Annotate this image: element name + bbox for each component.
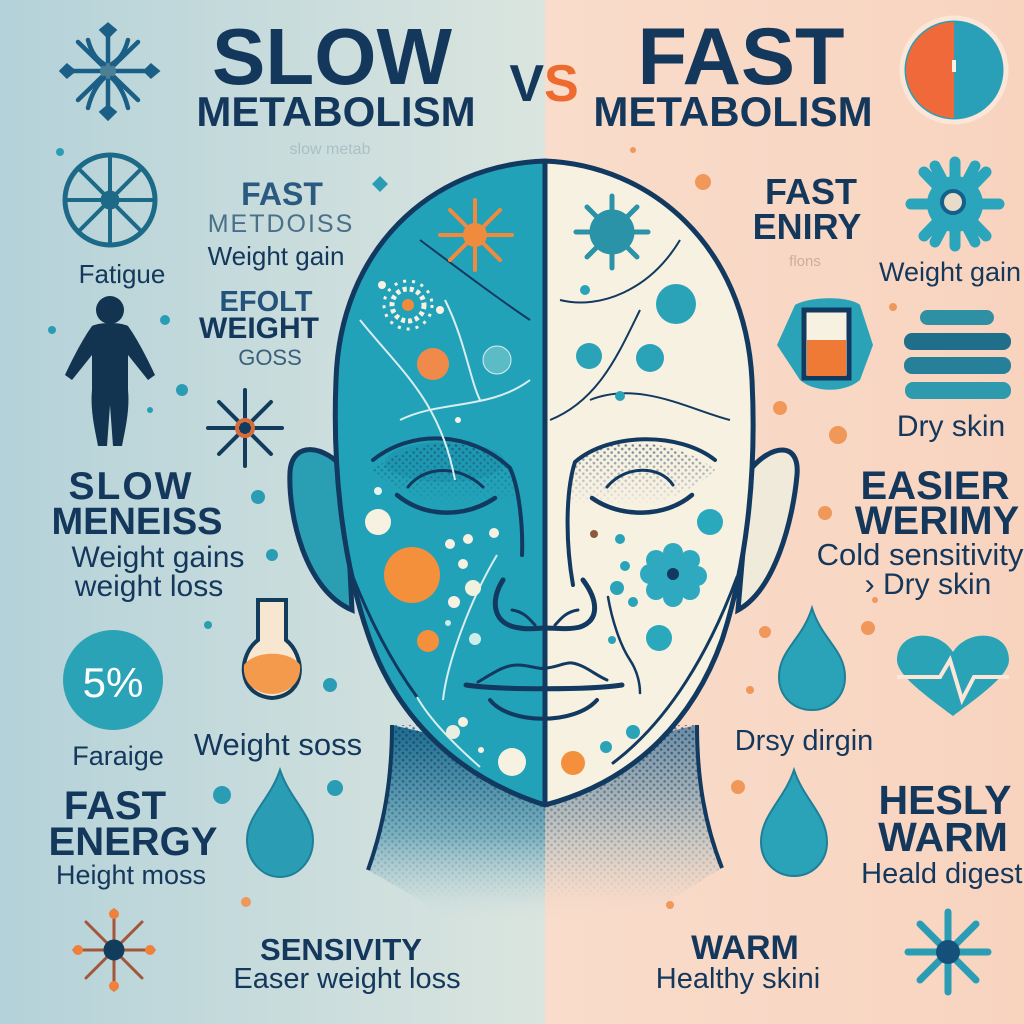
title: fast: FAST xyxy=(637,12,845,102)
label: weight gain: Weight gain xyxy=(208,241,344,271)
label: efolt: EFOLT xyxy=(220,286,312,318)
label: weight: WEIGHT xyxy=(199,312,319,345)
label: dry skin second: › Dry skin xyxy=(865,568,991,601)
label: warm bottom: WARM xyxy=(691,929,799,967)
label: healthy skin: Healthy skini xyxy=(656,963,820,995)
label: metdoiss: METDOISS xyxy=(208,210,354,238)
label: heald digestion: Heald digesti xyxy=(861,858,1024,890)
skin lines xyxy=(360,240,730,767)
label: height moss: Height moss xyxy=(56,860,206,890)
right half of head xyxy=(545,161,753,805)
subtitle: fast metabolism: METABOLISM xyxy=(593,88,873,135)
illustration: half blue half cream face xyxy=(287,158,800,900)
icon: teal flower on cheek xyxy=(640,543,707,607)
ghost text: left: slow metab xyxy=(290,141,370,158)
label: hesly: HESLY xyxy=(879,777,1011,823)
left face dots xyxy=(365,281,526,776)
label: fast energy top: FAST xyxy=(64,784,166,828)
label: sensivity: SENSIVITY xyxy=(260,932,422,967)
head outline xyxy=(335,161,753,805)
label: weight loss: weight loss xyxy=(75,570,223,603)
label: energy: ENERGY xyxy=(49,820,217,864)
icon: virus on forehead xyxy=(576,196,648,268)
label: easier: EASIER xyxy=(861,464,1009,508)
label: warm right: WARM xyxy=(878,814,1008,860)
right face dots xyxy=(561,284,723,775)
subtitle: slow metabolism: METABOLISM xyxy=(196,88,476,135)
icon: dark snowflake xyxy=(208,390,282,466)
label: meneiss: MENEISS xyxy=(51,501,223,543)
label: eniry: ENIRY xyxy=(753,206,861,247)
label: fast right: FAST xyxy=(765,171,857,212)
ghost text: right: flons xyxy=(789,253,821,270)
label: fast: FAST xyxy=(241,176,323,212)
label: drsy dirgin: Drsy dirgin xyxy=(735,725,873,757)
label: easer weight loss: Easer weight loss xyxy=(233,963,461,995)
label: werimy: WERIMY xyxy=(855,499,1019,543)
title: vs: VS xyxy=(509,55,579,113)
icon: teal circle with percent: 5% xyxy=(83,659,143,706)
icon: water drop left xyxy=(247,770,313,877)
label: faraige: Faraige xyxy=(72,741,164,771)
icon: water drop right top xyxy=(779,608,845,710)
icon: water drop right bottom xyxy=(761,770,827,876)
facial features xyxy=(353,438,737,763)
label: dry skin: Dry skin xyxy=(897,410,1005,443)
label: weight gain right: Weight gain xyxy=(879,257,1021,287)
icon: white gear on forehead xyxy=(384,281,432,329)
icon: stacked bars xyxy=(904,310,1011,399)
icon: teal circle with percent xyxy=(63,630,163,730)
icon: flask xyxy=(244,600,300,698)
icon: starburst bottom left xyxy=(73,909,155,991)
left ear xyxy=(290,450,352,610)
icon: wheel xyxy=(65,155,155,245)
icon: heart pulse xyxy=(897,636,1009,716)
icon: orange star on forehead xyxy=(440,200,512,270)
label: weight soss: Weight soss xyxy=(194,727,362,762)
eye socket shading xyxy=(374,442,715,502)
icon: snowflake top left xyxy=(62,25,157,118)
label: goss: GOSS xyxy=(238,345,302,370)
right ear xyxy=(738,450,797,610)
label: cold sensitivity: Cold sensitivity xyxy=(817,537,1023,572)
icon: battery panel xyxy=(777,298,873,390)
title: slow: SLOW xyxy=(212,12,452,101)
left half of head xyxy=(335,161,545,805)
label: slow: SLOW xyxy=(69,465,193,508)
neck xyxy=(366,725,724,900)
icon: pie clock top right xyxy=(902,18,1006,122)
icon: human silhouette xyxy=(65,296,155,446)
icon: snowflake bottom right xyxy=(908,912,988,992)
icon: gear right xyxy=(911,162,999,246)
label: weight gains: Weight gains xyxy=(72,541,244,574)
label: fatigue: Fatigue xyxy=(79,259,165,289)
